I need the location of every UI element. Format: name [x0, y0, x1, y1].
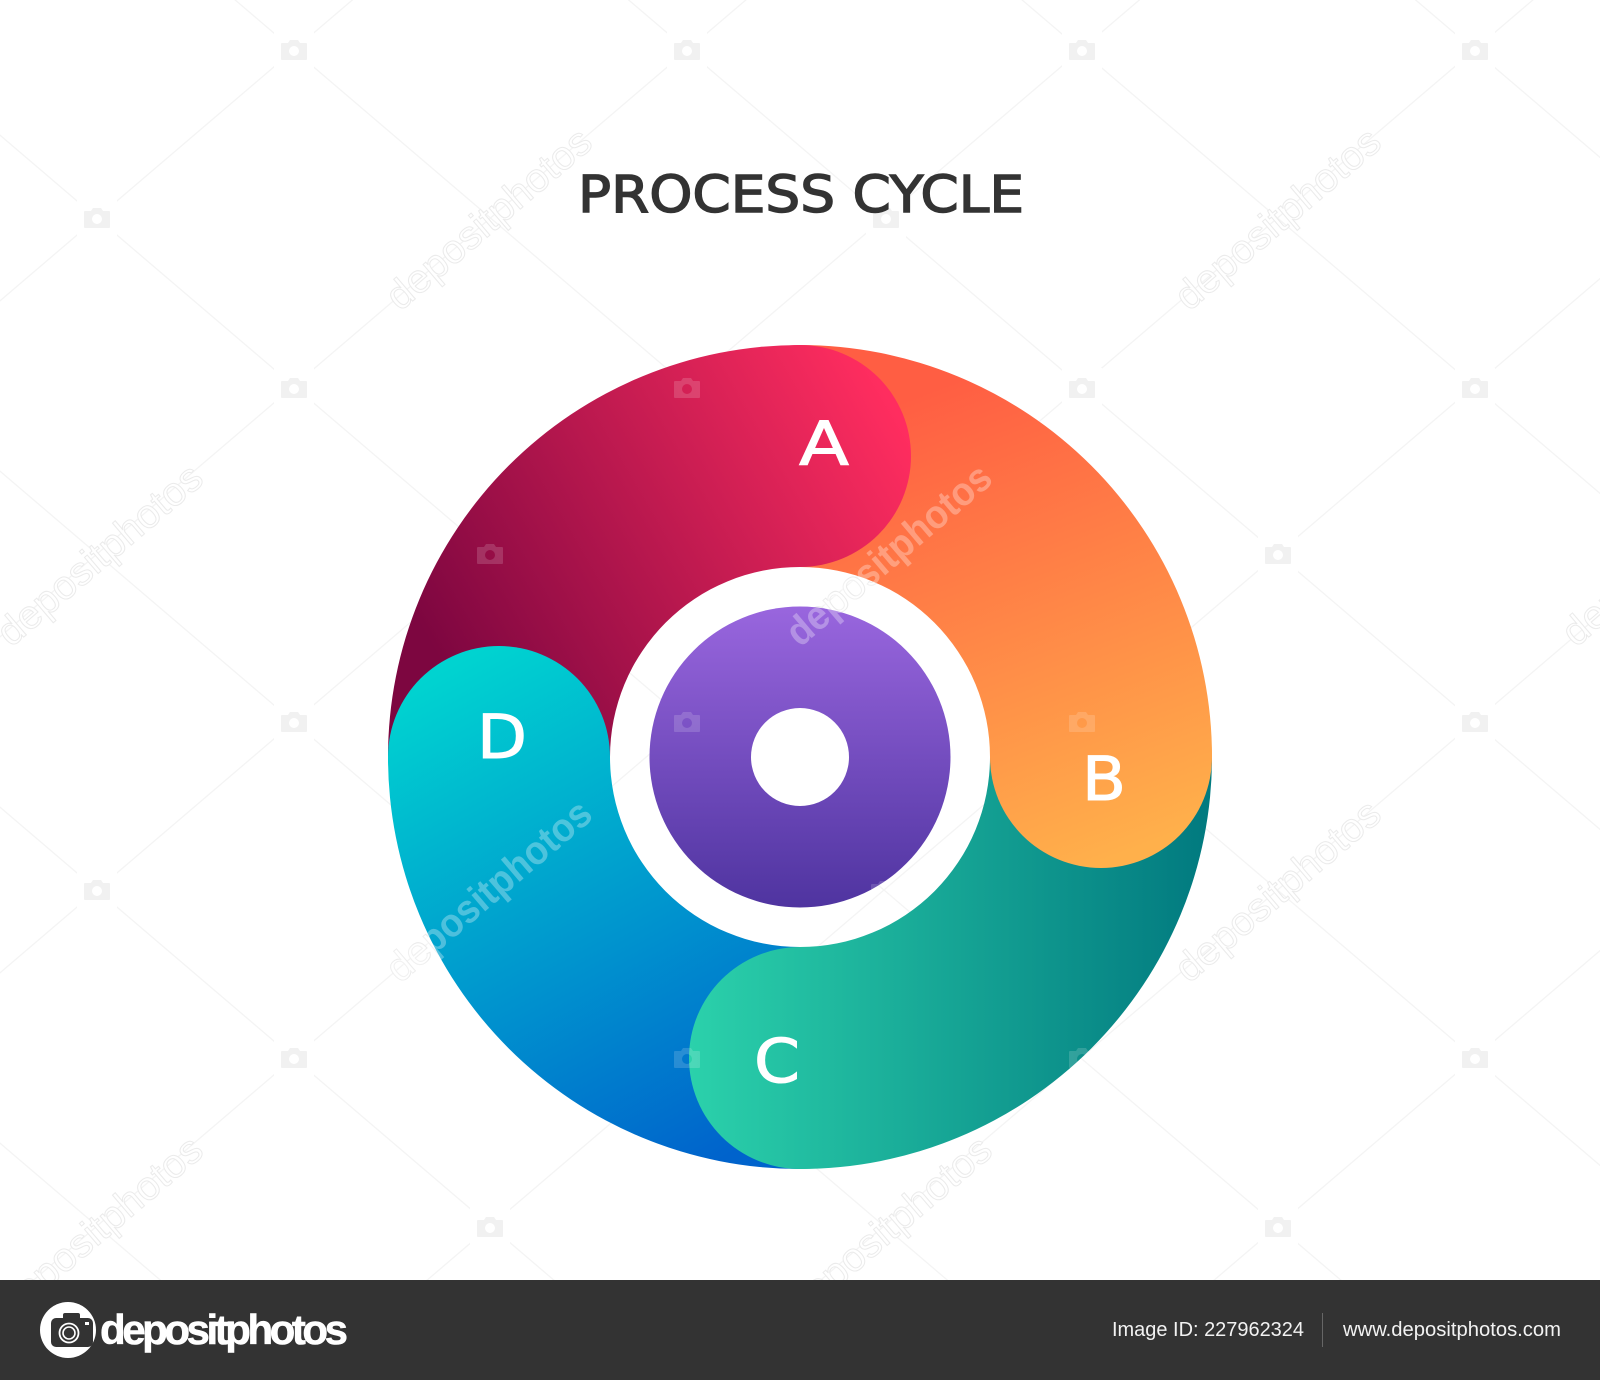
watermark text on white background: depositphotos: [777, 455, 1001, 655]
footer website: www.depositphotos.com: [1342, 1319, 1561, 1341]
watermark text on white background: depositphotos: [1166, 119, 1390, 319]
watermark text on white background: depositphotos: [777, 1127, 1001, 1327]
label C: C: [754, 1026, 800, 1097]
segment A head: [689, 345, 911, 567]
watermark over chart: [377, 455, 1001, 991]
segment B head: [990, 646, 1212, 868]
center white hole: [751, 708, 849, 806]
label A: A: [799, 409, 849, 480]
watermark camera icons over chart: [477, 378, 1095, 1068]
footer logo wordmark: depositphotos: [100, 1306, 348, 1353]
segment C head: [689, 947, 911, 1169]
watermark text on white background: depositphotos: [377, 791, 601, 991]
watermark text on white background: depositphotos: [1166, 791, 1390, 991]
watermark over chart: depositphotos: [777, 455, 1001, 655]
segment D head: [388, 646, 610, 868]
footer bar: [0, 1280, 1600, 1380]
footer image id: Image ID: 227962324: [1112, 1319, 1304, 1341]
watermark text on white background: depositphotos: [377, 119, 601, 319]
footer logo icon: [40, 1302, 96, 1358]
label D: D: [477, 702, 527, 773]
title: PROCESS CYCLE: [578, 166, 1024, 225]
footer divider: [1322, 1313, 1323, 1347]
center purple ring: [650, 606, 950, 908]
label B: B: [1082, 744, 1126, 815]
watermark camera icons on white: [77, 30, 1495, 1247]
segment bodies: [388, 345, 1212, 1169]
watermark over chart: depositphotos: [377, 791, 601, 991]
